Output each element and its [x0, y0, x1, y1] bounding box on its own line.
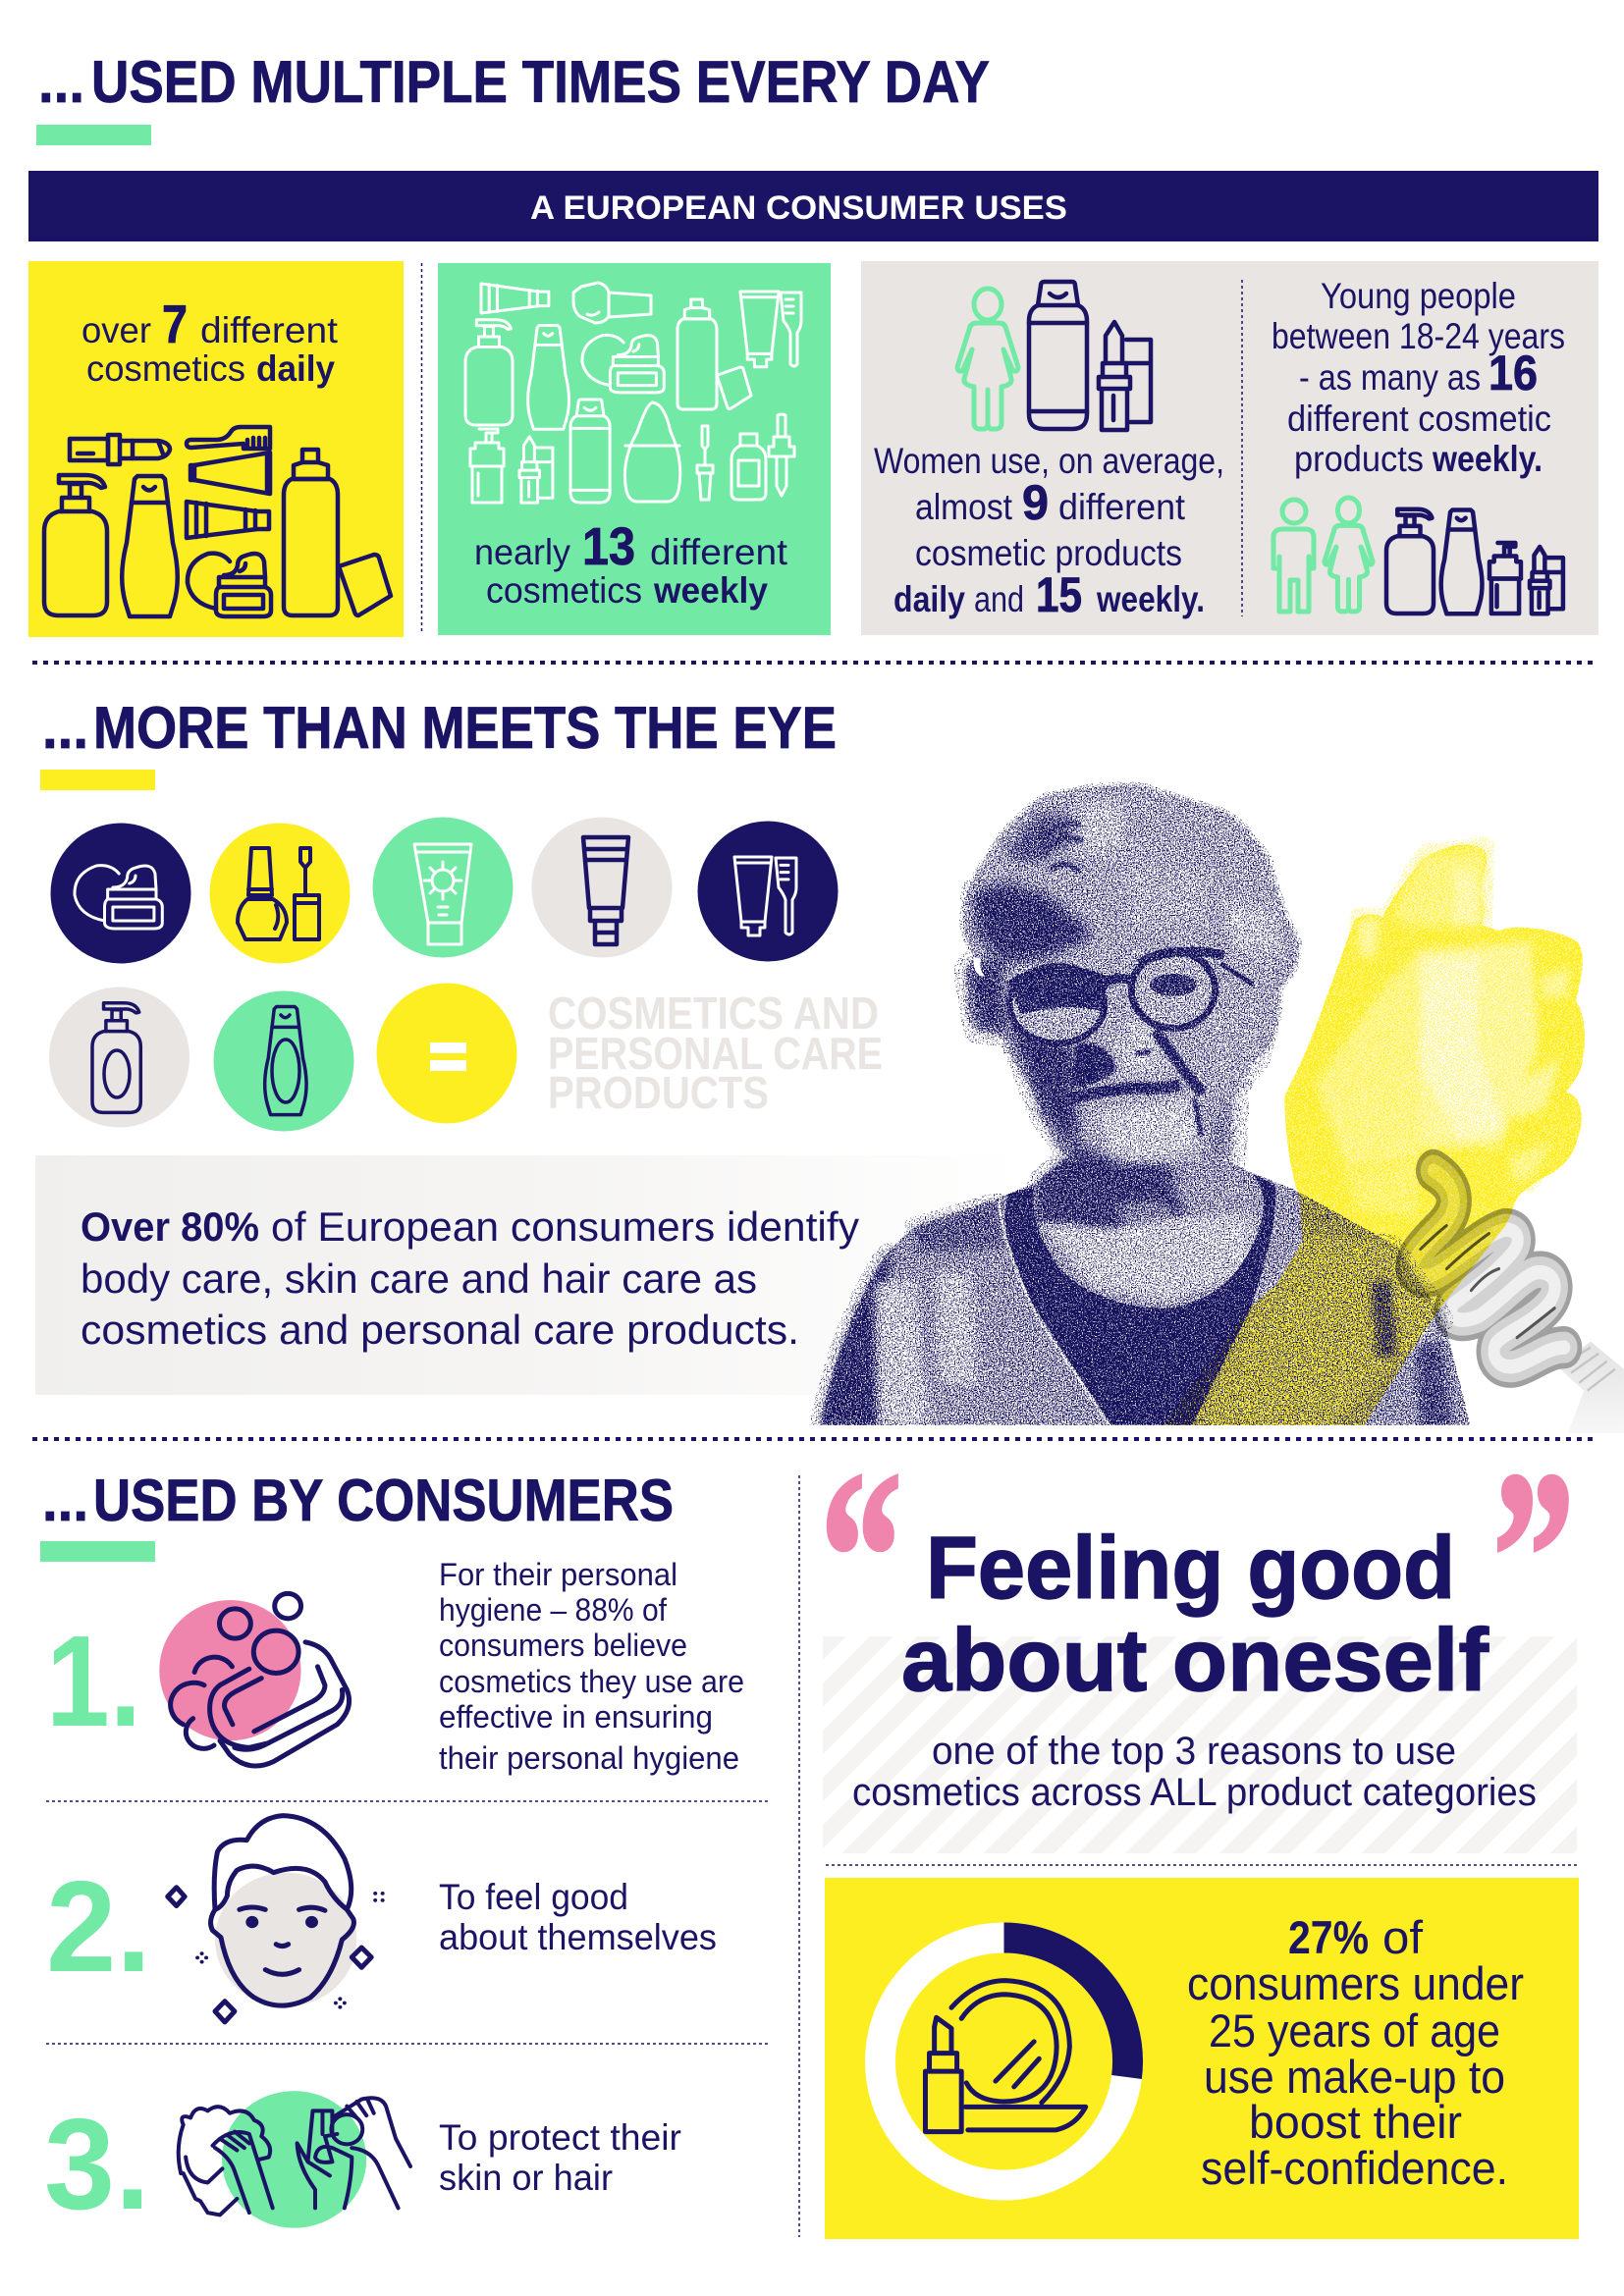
- text: personal hygiene: [439, 1557, 744, 1776]
- list item 3: protect skin or hair: [44, 2091, 681, 2236]
- stat text: women use almost 9 daily and 15 weekly: and: [974, 579, 1024, 619]
- list item 1: personal hygiene: 1.: [46, 1609, 141, 1753]
- icon: pump bottle on gray: [49, 988, 189, 1127]
- banner: a European consumer uses: A EUROPEAN CONSUMER USES: [530, 189, 1067, 227]
- heading: used multiple times every day: USED MULTIPLE TIMES EVERY DAY: [91, 49, 990, 115]
- list item 3: protect skin or hair: 3.: [44, 2092, 150, 2236]
- stat text: young people as many as 16 weekly: different cosmetic: [1287, 399, 1551, 439]
- stat text: over 7 different cosmetics daily: different: [200, 310, 339, 350]
- icon: nail polish and mascara on yellow: [210, 823, 350, 964]
- heading: more than meets the eye: [40, 695, 837, 790]
- stat text: young people as many as 16 weekly: weekly.: [1432, 439, 1543, 479]
- text: to protect their skin or hair: skin or hair: [439, 2158, 613, 2198]
- stat text: 27% of consumers under 25: boost their: [1249, 2096, 1462, 2148]
- text block: over 80% of European consumers: body care, skin care and hair care as: [81, 1255, 757, 1302]
- text: personal hygiene: effective in ensuring: [439, 1699, 713, 1735]
- stat text: women use almost 9 daily and 15 weekly: different: [1058, 487, 1186, 527]
- label: cosmetics and personal care products: PERSONAL CARE: [548, 1028, 883, 1079]
- icon: cream jar on navy: [51, 823, 190, 964]
- stat text: women use almost 9 daily and 15 weekly: 15: [1036, 567, 1082, 622]
- stat text: women use almost 9 daily and 15 weekly: 9: [1022, 475, 1049, 530]
- label: cosmetics and personal care products: COSMETICS AND: [548, 988, 879, 1039]
- icon: tube on gray: [532, 817, 672, 958]
- list item 2: feel good: [46, 1816, 717, 2022]
- icon: soap and bubbles: [159, 1593, 350, 1766]
- quote: feeling good about oneself: about oneself: [901, 1612, 1489, 1710]
- text: top 3 reason: [852, 1730, 1537, 1814]
- stat text: nearly 13 different cosmetics weekly: weekly: [653, 570, 768, 611]
- dark top: [1005, 1174, 1275, 1425]
- photo: yellow hand holding perfume bottle: [810, 766, 1624, 1433]
- text block: over 80% of European consumers: cosmetics and personal care products.: [81, 1307, 799, 1353]
- stat text: over 7 different cosmetics daily: over: [81, 310, 151, 350]
- stat text: 27% of consumers under 25: consumers under: [1187, 1957, 1524, 2009]
- stat text: over 7 different cosmetics daily: daily: [256, 348, 335, 389]
- stat text: women use almost 9 daily and 15 weekly: cosmetic products: [915, 533, 1182, 573]
- circle icons: product categories: [49, 817, 839, 1131]
- ear crescent and earrings: [973, 957, 985, 977]
- icon: smiling face with sparkles: [168, 1816, 385, 2022]
- text: to feel good about themselves: about themselves: [439, 1917, 717, 1957]
- heading: used by consumers: [40, 1468, 674, 1562]
- icons: thirteen cosmetic products: [465, 283, 801, 503]
- quote panel: hatched background: [823, 1636, 1577, 1853]
- icon: sunscreen tube on green: [373, 817, 513, 958]
- icon: washing hair and applying cream: [179, 2091, 410, 2228]
- text: top 3 reason: cosmetics across ALL product categories: [852, 1771, 1537, 1814]
- text block: over 80% of European consumers: of European consumers identify: [271, 1203, 859, 1250]
- text: personal hygiene: For their personal: [439, 1557, 677, 1592]
- stat text: nearly 13 different cosmetics weekly: 13: [582, 517, 635, 576]
- text: personal hygiene: cosmetics they use are: [439, 1664, 744, 1699]
- stat text: nearly 13 different cosmetics weekly: nearly: [474, 532, 570, 572]
- quote mark: opening: “: [820, 1421, 902, 1693]
- stat text: women use almost 9 daily and 15 weekly: weekly.: [1096, 579, 1205, 619]
- icon: equals sign on yellow: [377, 984, 516, 1123]
- text: to feel good about themselves: [439, 1877, 717, 1957]
- text block: over 80% of European consumers: Over 80%: [81, 1203, 259, 1250]
- label: cosmetics and personal care products: [548, 988, 883, 1118]
- quote: feeling good about oneself: Feeling good: [926, 1520, 1455, 1618]
- heading: used by consumers: ...: [42, 1468, 88, 1533]
- stat text: 27% of consumers under 25: of: [1382, 1911, 1424, 1963]
- quote mark: closing: ”: [1492, 1421, 1575, 1693]
- stat text: 27% of consumers under 25: self-confidence.: [1201, 2142, 1508, 2194]
- stat text: 27% of consumers under 25: [1187, 1911, 1524, 2194]
- quote: feeling good about oneself: [901, 1520, 1489, 1710]
- photo: halftone portrait of an older woman: [810, 766, 1624, 1433]
- stat text: over 7 different cosmetics daily: cosmetics: [86, 348, 245, 389]
- stat text: 27% of consumers under 25: 27%: [1288, 1911, 1369, 1963]
- stat text: nearly 13 different cosmetics weekly: cosmetics: [486, 570, 642, 611]
- text strip background: [35, 1155, 1027, 1395]
- icons: seven cosmetic products: [44, 427, 391, 616]
- stat text: women use almost 9 daily and 15 weekly: [874, 441, 1224, 622]
- stat text: 27% of consumers under 25: 25 years of age: [1209, 2004, 1500, 2056]
- text: top 3 reason: one of the top 3 reasons to use: [932, 1730, 1456, 1773]
- head, hair and glasses: [962, 785, 1299, 1188]
- text: personal hygiene: their personal hygiene: [439, 1740, 739, 1776]
- panel: over 7 cosmetics daily: [28, 261, 404, 637]
- list item 2: feel good: 2.: [46, 1854, 151, 1999]
- text: personal hygiene: consumers believe: [439, 1628, 687, 1663]
- stat text: women use almost 9 daily and 15 weekly: almost: [915, 487, 1013, 527]
- text: to protect their skin or hair: [439, 2117, 681, 2198]
- panel: 27% use make-up for self-confidence: [825, 1878, 1579, 2239]
- icon: toothpaste and toothbrush on navy: [697, 821, 839, 962]
- left lens: [1009, 966, 1105, 1043]
- stat text: over 7 different cosmetics daily: 7: [162, 294, 188, 354]
- text block: over 80% of European consumers: [81, 1203, 859, 1353]
- stat text: women use almost 9 daily and 15 weekly: daily: [893, 579, 965, 619]
- right lens: [1131, 951, 1216, 1029]
- stat text: young people as many as 16 weekly: 16: [1489, 346, 1538, 400]
- stat text: young people as many as 16 weekly: between 18-24 years: [1272, 316, 1565, 356]
- heading: used multiple times every day: [36, 49, 990, 145]
- label: cosmetics and personal care products: PRODUCTS: [548, 1067, 769, 1118]
- stat text: young people as many as 16 weekly: Young people: [1321, 276, 1516, 316]
- heading: more than meets the eye: ...: [42, 695, 88, 761]
- banner: a European consumer uses: [28, 171, 1598, 241]
- stat text: 27% of consumers under 25: use make-up to: [1204, 2051, 1505, 2103]
- list item 1: personal hygiene: [46, 1557, 744, 1776]
- panel: nearly 13 cosmetics weekly: [438, 263, 831, 635]
- body, neck and cardigan: [820, 1158, 1470, 1425]
- icon: shampoo bottle on green: [214, 991, 353, 1131]
- stat text: nearly 13 different cosmetics weekly: [474, 517, 788, 611]
- stat text: young people as many as 16 weekly: - as many as: [1299, 357, 1481, 398]
- stat text: young people as many as 16 weekly: [1272, 276, 1565, 479]
- stat text: nearly 13 different cosmetics weekly: different: [650, 532, 788, 572]
- stat text: young people as many as 16 weekly: products: [1294, 439, 1424, 479]
- icons: woman with bottle and lipstick: [957, 282, 1151, 430]
- text: to feel good about themselves: To feel good: [439, 1877, 628, 1917]
- photo: toothpaste squiggle and tube: [1413, 1170, 1624, 1433]
- panel: women and young people: [861, 261, 1598, 635]
- stat text: women use almost 9 daily and 15 weekly: Women use, on average,: [874, 441, 1224, 481]
- text: personal hygiene: hygiene – 88% of: [439, 1592, 667, 1628]
- icons: young man, woman and products: [1273, 498, 1563, 614]
- heading: more than meets the eye: MORE THAN MEETS THE EYE: [93, 695, 837, 761]
- heading: used multiple times every day: ...: [38, 49, 84, 115]
- stat text: over 7 different cosmetics daily: [81, 294, 339, 389]
- text: to protect their skin or hair: To protect their: [439, 2117, 681, 2158]
- icon: lipstick and mirror: [925, 1981, 1086, 2132]
- heading: used by consumers: USED BY CONSUMERS: [93, 1468, 674, 1533]
- donut chart: 27%: [880, 1938, 1128, 2185]
